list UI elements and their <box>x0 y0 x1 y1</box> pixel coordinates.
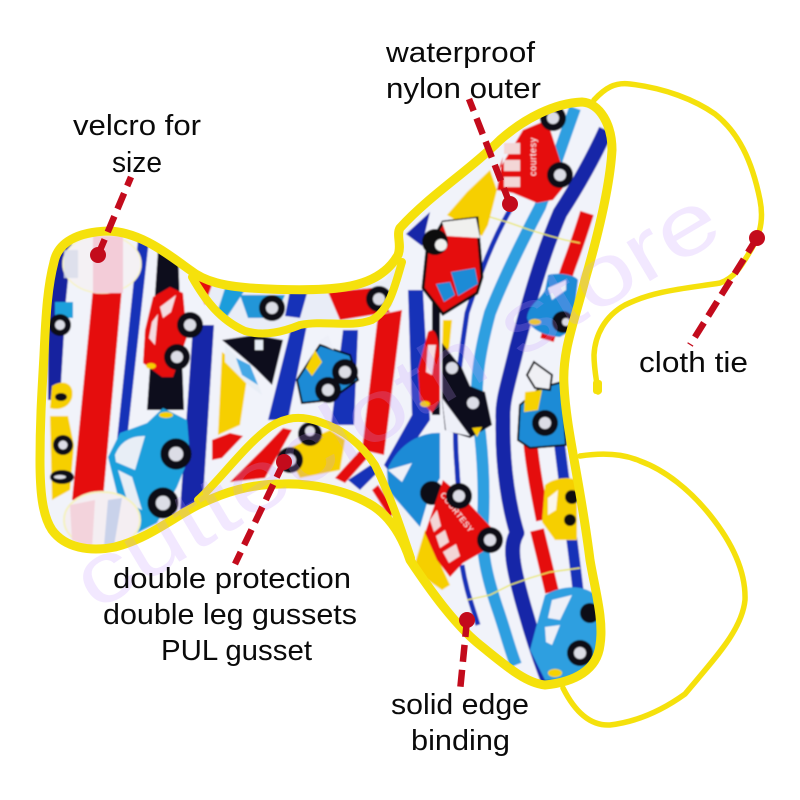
car: blue beside gusset <box>387 433 444 527</box>
label: velcro for size <box>73 110 201 179</box>
bus: red bottom <box>425 480 503 577</box>
car: blue bottom right <box>530 587 600 680</box>
label: solid edge binding: solid edge <box>391 689 529 721</box>
car: yellow right <box>542 478 579 540</box>
stitching <box>467 217 580 600</box>
label: double protection <box>103 563 357 667</box>
yellow edge binding <box>40 102 612 685</box>
label: velcro for size: size <box>112 147 162 179</box>
label: cloth tie: cloth tie <box>639 347 748 379</box>
label: velcro for size: velcro for <box>73 110 201 142</box>
car: blue centre <box>212 335 358 460</box>
velcro patch bottom <box>64 492 140 548</box>
upper leg gusset binding <box>192 262 402 333</box>
car: red left <box>143 287 203 377</box>
car: black and white right <box>442 343 492 438</box>
callout line: gusset <box>235 454 292 564</box>
callout line: cloth tie <box>690 230 765 345</box>
label: double protection: PUL gusset <box>161 635 312 667</box>
watermark: cuttecloth store <box>56 170 736 628</box>
diaper fabric <box>44 106 608 680</box>
upper cloth tie <box>594 84 762 392</box>
bus lettering: COURTESY <box>438 491 475 534</box>
lower gusset lining <box>230 422 392 517</box>
velcro patch top <box>63 235 141 293</box>
bus: red top <box>497 105 573 203</box>
car: blue right upper <box>527 274 578 337</box>
bus lettering: courtesy <box>528 137 538 176</box>
label: waterproof nylon outer <box>385 37 541 105</box>
centre stripes <box>218 212 452 475</box>
car: blue right lower with white flag <box>518 362 566 448</box>
left panel stripes <box>48 240 214 510</box>
cloth ties <box>563 84 762 725</box>
callout line: velcro <box>90 177 131 263</box>
tie knot <box>593 380 602 394</box>
right panel stripes <box>413 108 606 685</box>
callout line: edge binding <box>459 612 475 691</box>
car: blue lower left <box>108 408 192 533</box>
label: waterproof nylon outer: nylon outer <box>386 73 541 105</box>
lower leg gusset binding <box>198 418 411 558</box>
van: red with roof rack <box>422 218 482 314</box>
label: solid edge binding <box>391 689 529 757</box>
callout line: waterproof <box>469 99 518 212</box>
label: solid edge binding: binding <box>411 725 510 757</box>
car: red behind fold <box>418 330 440 413</box>
label: double protection: double protection <box>113 563 351 595</box>
car: yellow left edge <box>49 302 74 500</box>
upper gusset lining <box>198 280 392 324</box>
lower cloth tie <box>563 454 745 725</box>
car: white and black centre <box>222 335 283 395</box>
fabric base <box>44 106 608 680</box>
label: double protection: double leg gussets <box>103 599 357 631</box>
label: waterproof nylon outer: waterproof <box>385 37 536 69</box>
